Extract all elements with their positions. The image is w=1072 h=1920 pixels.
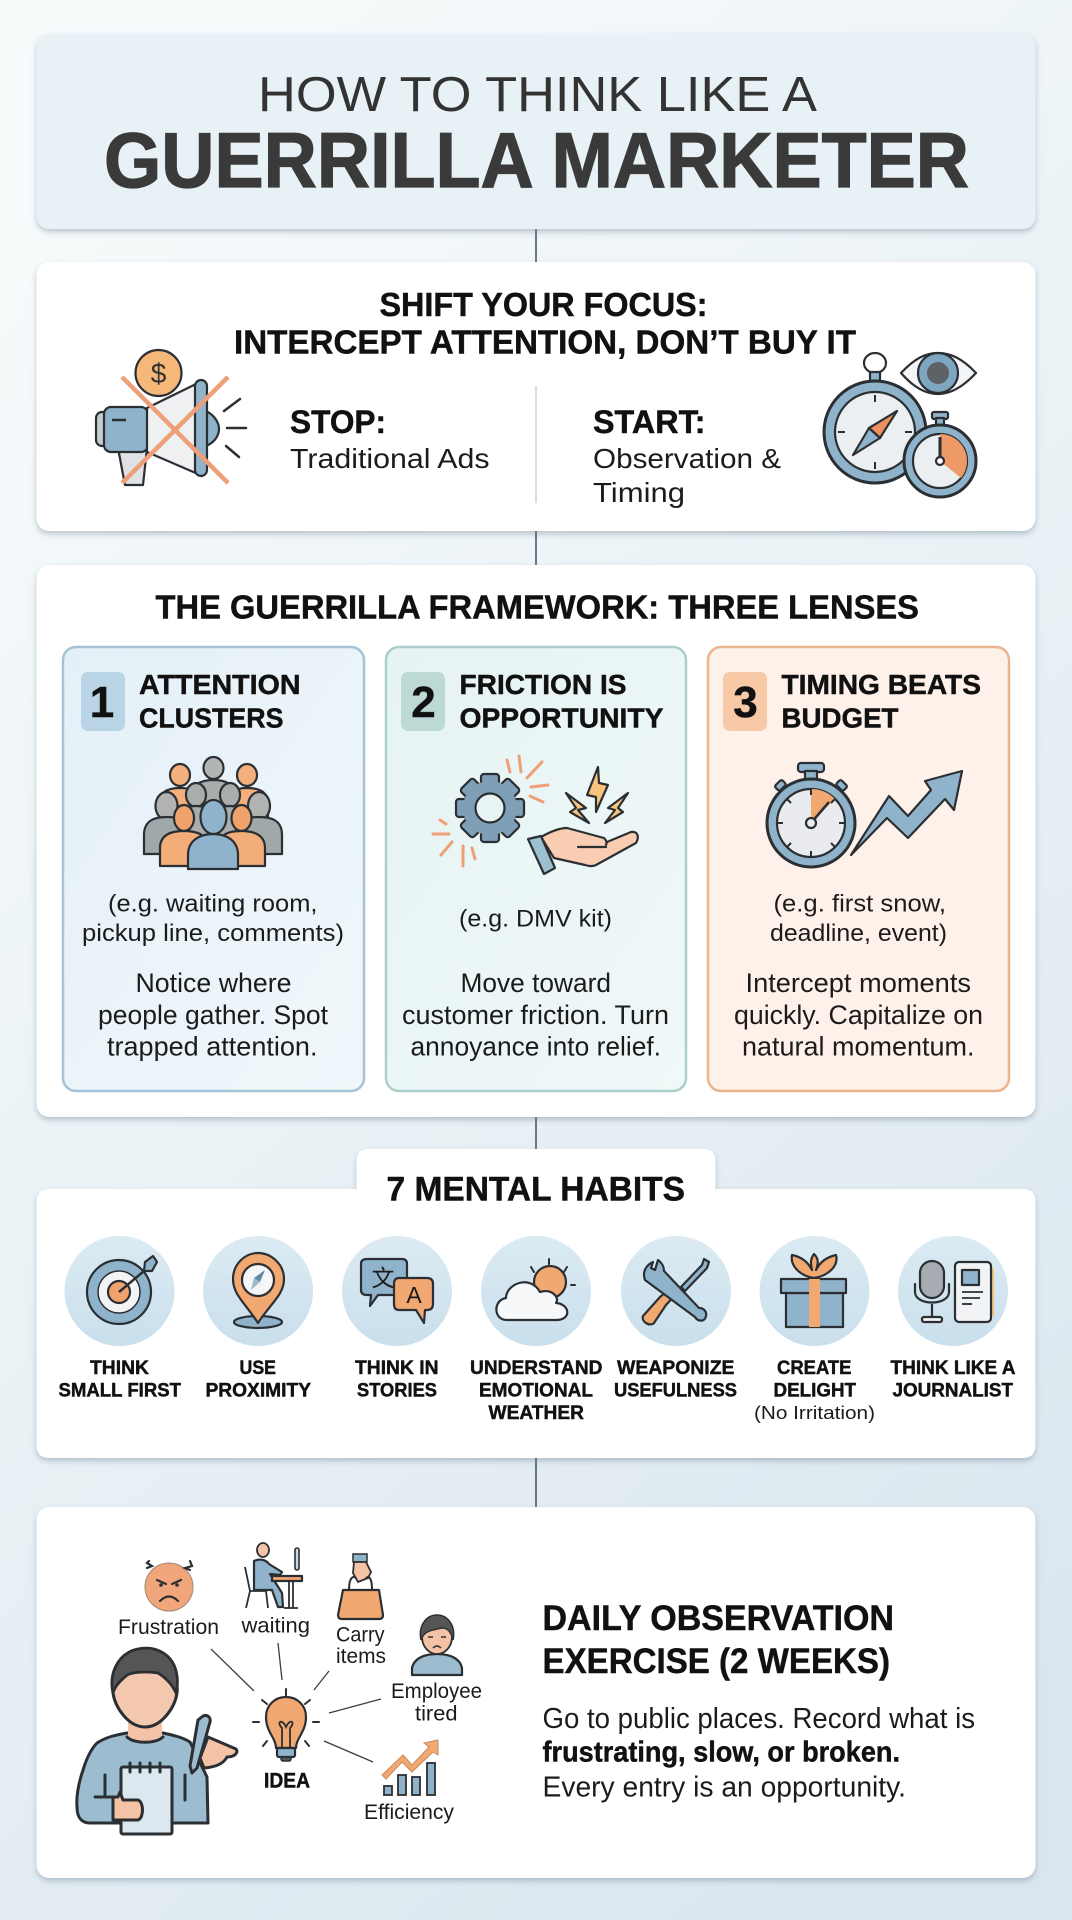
- card title: [139, 669, 300, 734]
- icon: carried bag: [338, 1554, 383, 1619]
- icon: translate speech bubbles: 文: [372, 1265, 394, 1291]
- example: [82, 890, 344, 947]
- icon: map pin: [233, 1253, 284, 1328]
- icon: microphone and notebook: [915, 1261, 994, 1322]
- example: deadline, event): [770, 920, 947, 947]
- badge 2: 2: [411, 678, 436, 727]
- icon: cloud and sun: [496, 1259, 575, 1320]
- habit: think like a journalist: [890, 1236, 1016, 1402]
- description: quickly. Capitalize on: [734, 1000, 983, 1030]
- icon: crossed-out megaphone: $: [151, 358, 167, 389]
- body text: Go to public places. Record what is: [542, 1703, 975, 1735]
- card title: CLUSTERS: [139, 702, 284, 734]
- icon: small stopwatch: [904, 412, 976, 497]
- example: pickup line, comments): [82, 920, 344, 947]
- stop text: STOP:: [290, 404, 386, 440]
- panel: 7 mental habits: [36, 1149, 1036, 1458]
- connector lines: [535, 225, 537, 1510]
- heading: INTERCEPT ATTENTION, DON’T BUY IT: [234, 324, 856, 360]
- heading: EXERCISE (2 WEEKS): [542, 1642, 890, 1681]
- icon: eye: [901, 353, 976, 394]
- habit: use proximity: USE: [240, 1358, 276, 1379]
- label: items: [336, 1645, 386, 1668]
- body text: Every entry is an opportunity.: [542, 1772, 906, 1804]
- label: Employee: [391, 1680, 482, 1703]
- icon: stopwatch and rising arrow: [767, 763, 962, 867]
- habit: think in stories: [342, 1236, 452, 1402]
- description: [98, 968, 328, 1062]
- label: Frustration: [118, 1616, 219, 1639]
- body text: [542, 1703, 975, 1804]
- icon: compass watch: [824, 353, 926, 483]
- icon: gear, sparks and hand: [433, 756, 638, 874]
- habit: weaponize usefulness: WEAPONIZE: [617, 1358, 734, 1379]
- heading: THE GUERRILLA FRAMEWORK: THREE LENSES: [156, 588, 919, 626]
- label: [336, 1624, 386, 1668]
- title line 2: GUERRILLA MARKETER: [104, 116, 969, 204]
- panel: shift your focus: [36, 262, 1036, 531]
- example: (e.g. waiting room,: [108, 890, 318, 918]
- icon: efficiency chart: [382, 1740, 438, 1795]
- habit: weaponize usefulness: USEFULNESS: [614, 1380, 737, 1402]
- panel: daily observation exercise: [36, 1507, 1036, 1878]
- label: waiting: [240, 1614, 310, 1638]
- heading: DAILY OBSERVATION: [542, 1599, 894, 1638]
- habit: weaponize usefulness: [614, 1236, 737, 1402]
- habit: understand emotional weather: WEATHER: [488, 1403, 584, 1424]
- stop text: Traditional Ads: [290, 443, 490, 474]
- heading: SHIFT YOUR FOCUS:: [380, 286, 708, 323]
- card 1: attention clusters: [63, 647, 364, 1091]
- description: Intercept moments: [746, 968, 971, 998]
- habit: create delight: CREATE: [777, 1358, 852, 1379]
- habit: create delight: DELIGHT: [774, 1380, 856, 1402]
- label: tired: [415, 1702, 458, 1726]
- habit: understand emotional weather: EMOTIONAL: [479, 1380, 593, 1402]
- icon: frustrated face: [145, 1561, 193, 1611]
- example: (e.g. first snow,: [774, 890, 946, 918]
- example: (e.g. DMV kit): [459, 906, 612, 932]
- description: people gather. Spot: [98, 1000, 328, 1030]
- description: Notice where: [136, 968, 292, 998]
- card title: TIMING BEATS: [782, 669, 981, 700]
- icon: target: [87, 1256, 157, 1324]
- start text: [593, 404, 781, 508]
- label: Efficiency: [364, 1801, 454, 1824]
- panel: framework: [36, 565, 1036, 1117]
- icon: gift box: [781, 1254, 846, 1327]
- habit: think like a journalist: THINK LIKE A: [890, 1358, 1016, 1379]
- description: customer friction. Turn: [402, 1000, 669, 1030]
- habit: think small first: SMALL FIRST: [58, 1380, 181, 1402]
- habit: think in stories: STORIES: [357, 1380, 437, 1402]
- icon: light bulb: [253, 1689, 319, 1761]
- habit: create delight: (No Irritation): [754, 1403, 875, 1423]
- start text: START:: [593, 404, 706, 440]
- label: Carry: [336, 1624, 385, 1646]
- icon: translate speech bubbles: A: [406, 1282, 422, 1308]
- card title: FRICTION IS: [460, 669, 626, 700]
- title line 1: HOW TO THINK LIKE A: [258, 68, 817, 122]
- card title: [460, 669, 664, 734]
- body text: frustrating, slow, or broken.: [542, 1736, 900, 1768]
- icon: translate speech bubbles: [361, 1259, 433, 1323]
- description: Move toward: [460, 968, 611, 998]
- heading: [542, 1599, 894, 1681]
- habit: think like a journalist: JOURNALIST: [892, 1380, 1013, 1402]
- badge 3: 3: [733, 678, 758, 727]
- habit: understand emotional weather: [470, 1236, 602, 1424]
- card title: BUDGET: [782, 702, 898, 734]
- label: [391, 1680, 482, 1726]
- label: IDEA: [264, 1770, 310, 1792]
- icon: crossed-out megaphone: [96, 350, 246, 485]
- start text: Timing: [593, 477, 685, 508]
- heading: [234, 286, 856, 360]
- habit: think in stories: THINK IN: [355, 1358, 438, 1379]
- badge 1: [81, 672, 125, 731]
- icon: wrench and screwdriver: [643, 1259, 709, 1324]
- habit: create delight: [754, 1236, 875, 1423]
- badge 2: [401, 672, 445, 731]
- divider: [535, 386, 537, 503]
- card title: OPPORTUNITY: [460, 702, 664, 734]
- description: annoyance into relief.: [410, 1032, 661, 1062]
- description: natural momentum.: [742, 1032, 974, 1062]
- card title: [782, 669, 981, 734]
- description: trapped attention.: [107, 1032, 318, 1062]
- panel: title: [36, 34, 1036, 229]
- habit: use proximity: [203, 1236, 313, 1402]
- heading: 7 MENTAL HABITS: [386, 1170, 685, 1208]
- card 2: friction: [386, 647, 686, 1091]
- stop text: [290, 404, 490, 474]
- card title: ATTENTION: [139, 669, 300, 700]
- description: [402, 968, 669, 1062]
- description: [734, 968, 983, 1062]
- habit: use proximity: PROXIMITY: [206, 1380, 311, 1402]
- example: [770, 890, 947, 947]
- card 3: timing: [708, 647, 1009, 1091]
- badge 1: 1: [90, 678, 114, 727]
- icon: tired employee: [412, 1615, 462, 1675]
- habit: think small first: [58, 1236, 181, 1402]
- connector lines to idea: [211, 1643, 381, 1762]
- badge 3: [723, 672, 767, 731]
- icon: person at desk: [245, 1543, 302, 1608]
- illustration: man with notepad: [77, 1648, 237, 1834]
- start text: Observation &: [593, 443, 781, 474]
- icon: crowd: [144, 757, 282, 869]
- habit: understand emotional weather: UNDERSTAND: [470, 1358, 602, 1379]
- habit: think small first: THINK: [90, 1358, 149, 1379]
